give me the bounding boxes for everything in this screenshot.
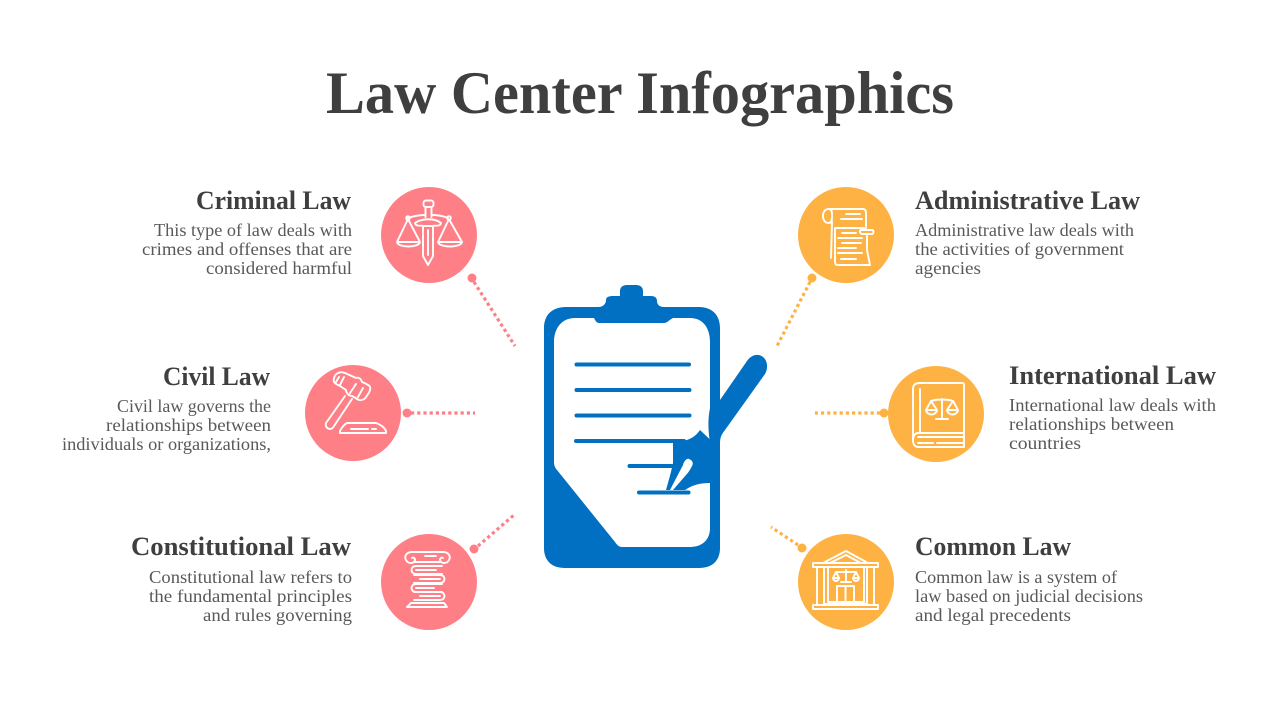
description: relationships between	[106, 415, 271, 435]
icon: courthouse	[798, 534, 894, 630]
description: individuals or organizations,	[62, 434, 271, 454]
description: agencies	[915, 258, 981, 278]
written lines	[576, 364, 690, 492]
description: the activities of government	[915, 239, 1124, 259]
panel: common law	[798, 531, 1143, 630]
description: and legal precedents	[915, 605, 1071, 625]
description: countries	[1009, 433, 1081, 453]
title: Law Center Infographics	[326, 60, 954, 126]
connector: common law	[771, 527, 806, 552]
icon: law book	[888, 366, 984, 462]
nib body	[666, 443, 710, 490]
icon: scales and sword	[381, 187, 477, 283]
description	[142, 220, 352, 278]
panel: international law	[888, 360, 1216, 462]
description: This type of law deals with	[154, 220, 352, 240]
description	[1009, 395, 1216, 453]
icon: legal scroll	[798, 187, 894, 283]
connector: administrative law	[777, 274, 816, 346]
panel: administrative law	[798, 185, 1140, 283]
description	[62, 396, 271, 454]
central clipboard illustration	[544, 285, 767, 568]
connector: international law	[815, 408, 888, 418]
description: Common law is a system of	[915, 567, 1117, 587]
panel: criminal law	[142, 185, 477, 283]
description: considered harmful	[206, 258, 352, 278]
description: Administrative law deals with	[915, 220, 1134, 240]
panel: constitutional law	[131, 531, 477, 630]
pen handle	[700, 355, 767, 470]
clipboard board and clip	[544, 285, 720, 568]
connector: civil law	[402, 408, 475, 418]
description: crimes and offenses that are	[142, 239, 352, 259]
heading: Constitutional Law	[131, 531, 351, 561]
connector: criminal law	[468, 274, 515, 346]
description: law based on judicial decisions	[915, 586, 1143, 606]
connector: constitutional law	[470, 515, 514, 554]
heading: Civil Law	[163, 361, 270, 391]
panel: civil law	[62, 361, 401, 461]
description: Constitutional law refers to	[149, 567, 352, 587]
icon: column of books	[381, 534, 477, 630]
heading: Administrative Law	[915, 185, 1140, 215]
heading: International Law	[1009, 360, 1216, 390]
description: the fundamental principles	[149, 586, 352, 606]
nib slit highlight	[670, 459, 693, 490]
heading: Common Law	[915, 531, 1071, 561]
description: relationships between	[1009, 414, 1174, 434]
description: International law deals with	[1009, 395, 1216, 415]
description: and rules governing	[203, 605, 352, 625]
description	[149, 567, 352, 625]
description	[915, 567, 1143, 625]
icon: gavel	[305, 365, 401, 461]
heading: Criminal Law	[196, 185, 351, 215]
description	[915, 220, 1134, 278]
paper sheet	[554, 318, 710, 547]
description: Civil law governs the	[117, 396, 271, 416]
